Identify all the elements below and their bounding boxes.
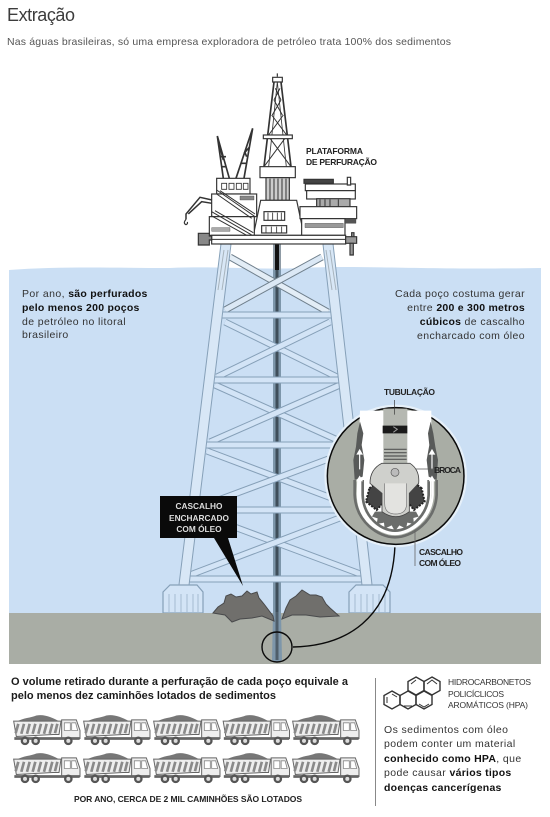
platform support structure xyxy=(184,244,368,585)
label: plataforma: PLATAFORMA xyxy=(306,146,363,156)
label: cascalho com óleo: CASCALHO xyxy=(419,547,463,557)
pontoon right xyxy=(349,585,390,613)
platform xyxy=(184,73,357,255)
heading: volume xyxy=(11,676,349,702)
derrick xyxy=(263,73,292,167)
arrows xyxy=(357,450,434,495)
heading: volume: pelo menos dez caminhões lotados de sedimentos xyxy=(11,690,276,702)
cranes xyxy=(217,128,253,178)
horizontal braces xyxy=(222,312,332,318)
callout: cascalho encharcado: CASCALHO xyxy=(175,501,223,511)
text: right water note: cúbicos de cascalho xyxy=(420,316,525,328)
text: HPA description: podem conter um material xyxy=(384,738,516,750)
detail circle: drill bit xyxy=(324,400,467,547)
text: left water note: brasileiro xyxy=(22,329,69,341)
trucks: top row xyxy=(14,715,359,745)
label: tubulação: TUBULAÇÃO xyxy=(384,387,435,397)
sediment pile right xyxy=(282,590,339,619)
right modules xyxy=(300,177,357,235)
text: right water note: encharcado com óleo xyxy=(417,330,525,342)
text: HPA description xyxy=(384,724,522,794)
label: cascalho com óleo: COM ÓLEO xyxy=(419,557,461,568)
label: broca xyxy=(416,465,461,475)
label: HPA xyxy=(448,677,531,710)
pipe section xyxy=(383,400,407,464)
pipe xyxy=(273,268,281,614)
text: HPA description: pode causar vários tipos xyxy=(384,767,511,779)
text: right water note: Cada poço costuma gerar xyxy=(395,288,525,300)
heading: volume: O volume retirado durante a perfuração de cada poço equivale a xyxy=(11,676,349,688)
callout: cascalho encharcado xyxy=(160,496,243,586)
borehole xyxy=(272,612,282,662)
subtitle: Nas águas brasileiras, só uma empresa exploradora de petróleo trata 100% dos sedimentos xyxy=(7,36,451,48)
label: HPA: AROMÁTICOS (HPA) xyxy=(448,700,528,710)
text: left water note: Por ano, são perfurados xyxy=(22,288,148,300)
truck caption: POR ANO, CERCA DE 2 MIL CAMINHÕES SÃO LOTADOS xyxy=(74,794,302,804)
divider xyxy=(374,678,376,806)
title: Extração xyxy=(7,5,75,25)
label: cascalho com óleo xyxy=(415,530,463,568)
pipe above water xyxy=(273,244,281,270)
seabed xyxy=(9,613,541,664)
text: HPA description: conhecido como HPA, que xyxy=(384,753,522,765)
rock wall xyxy=(353,422,438,480)
label: plataforma xyxy=(306,146,377,167)
sediment pile left xyxy=(213,591,274,622)
water xyxy=(9,267,541,614)
deck xyxy=(198,233,357,255)
upper section above water xyxy=(230,257,328,312)
pontoon left xyxy=(163,585,203,613)
trucks: bottom row xyxy=(14,753,359,783)
text: left water note: de petróleo no litoral xyxy=(22,316,126,328)
callout: cascalho encharcado: COM ÓLEO xyxy=(176,523,222,534)
text: left water note xyxy=(22,288,148,341)
callout: cascalho encharcado: ENCHARCADO xyxy=(169,513,230,523)
text: right water note: entre 200 e 300 metros xyxy=(407,302,525,314)
label: plataforma: DE PERFURAÇÃO xyxy=(306,157,377,167)
text: HPA description: Os sedimentos com óleo xyxy=(384,724,508,736)
text: right water note xyxy=(395,288,525,342)
label: broca: BROCA xyxy=(434,465,461,475)
label: HPA: HIDROCARBONETOS xyxy=(448,677,531,687)
left modules xyxy=(184,178,257,235)
legs xyxy=(184,244,367,585)
detail connector xyxy=(262,545,395,662)
icon: HPA molecule xyxy=(384,677,440,709)
text: left water note: pelo menos 200 poços xyxy=(22,302,140,314)
text: HPA description: doenças cancerígenas xyxy=(384,782,502,794)
drill floor xyxy=(253,167,304,235)
drill bit xyxy=(366,463,425,531)
label: HPA: POLICÍCLICOS xyxy=(448,689,504,699)
